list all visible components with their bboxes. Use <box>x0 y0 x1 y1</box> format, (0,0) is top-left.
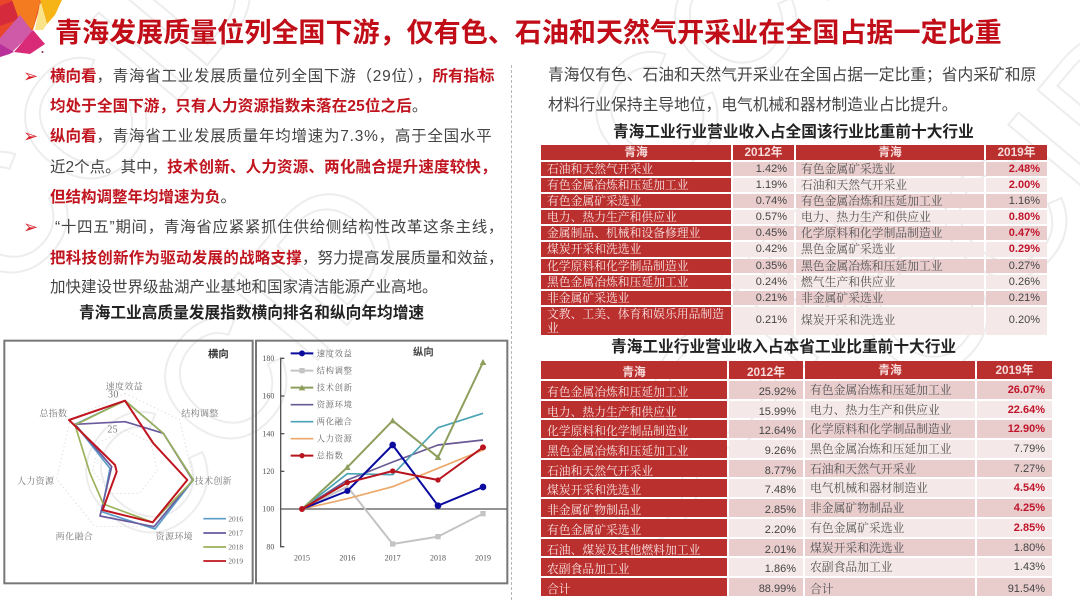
table 2 <box>541 361 1052 596</box>
table 2: 2012年 <box>747 365 785 379</box>
table 2: 7.79% <box>1014 443 1045 455</box>
table 1: 0.80% <box>1009 211 1040 223</box>
table 2: 1.43% <box>1014 561 1045 573</box>
table 2: 4.54% <box>1014 482 1045 494</box>
left text block: 但结构调整年均增速为负。 <box>50 189 236 206</box>
table 2: 8.77% <box>765 465 796 477</box>
left text block: 近2个点。其中，技术创新、人力资源、两化融合提升速度较快， <box>50 159 497 176</box>
table 1: 1.16% <box>1009 195 1040 207</box>
left text block: 均处于全国下游，只有人力资源指数未落在25位之后。 <box>50 98 428 115</box>
left text block: 纵向看，青海省工业发展质量年均增速为7.3%，高于全国水平 <box>50 128 492 145</box>
table 2: 合计 <box>547 582 571 596</box>
table 2: 电气机械和器材制造业 <box>810 481 928 495</box>
table 2: 7.27% <box>1014 463 1045 475</box>
table 1: 0.21% <box>756 314 787 326</box>
table 2: 有色金属冶炼和压延加工业 <box>810 383 952 397</box>
table 1: 有色金属矿采选业 <box>547 194 641 208</box>
table 1: 0.35% <box>756 260 787 272</box>
table 2: 青海 <box>878 363 902 377</box>
radar chart: 横向: 总指数 <box>39 408 67 419</box>
table 2: 1.86% <box>765 563 796 575</box>
table 1: 2012年 <box>744 145 783 159</box>
table 1: 黑色金属矿采选业 <box>801 242 895 256</box>
table 1: 0.45% <box>756 227 787 239</box>
table 1: 0.57% <box>756 211 787 223</box>
table 2: 合计 <box>810 582 834 596</box>
right intro text <box>548 66 1036 114</box>
line chart: 纵向: 2016 <box>339 554 355 563</box>
table 2: 2.01% <box>765 544 796 556</box>
table 2: 25.92% <box>759 386 796 398</box>
table 2: 石油和天然气开采业 <box>810 462 916 476</box>
table 2: 12.64% <box>759 425 796 437</box>
table 2: 电力、热力生产和供应业 <box>810 403 940 417</box>
radar chart: 横向 <box>3 340 254 584</box>
table 2: 2.85% <box>765 504 796 516</box>
radar chart: 横向: 两化融合 <box>56 530 93 541</box>
left text block: ➢ <box>23 217 38 238</box>
table 2: 煤炭开采和洗选业 <box>810 540 904 554</box>
chart heading: 青海工业高质量发展指数横向排名和纵向年均增速 <box>79 305 424 322</box>
table 1: 2.48% <box>1009 162 1040 174</box>
table 2: 非金属矿物制品业 <box>547 503 641 517</box>
left text block: “十四五”期间，青海省应紧紧抓住供给侧结构性改革这条主线， <box>55 219 504 236</box>
line chart: 纵向: 140 <box>262 429 274 438</box>
table 1: 非金属矿采选业 <box>801 291 884 305</box>
table 1: 石油和天然气开采业 <box>547 162 653 176</box>
table 2: 农副食品加工业 <box>810 560 893 574</box>
right intro text: 青海仅有色、石油和天然气开采业在全国占据一定比重；省内采矿和原 <box>548 67 1036 84</box>
legend <box>291 348 353 461</box>
radar chart: 横向: 2019 <box>228 557 243 566</box>
table 1: 非金属矿采选业 <box>547 291 630 305</box>
table 2: 黑色金属冶炼和压延加工业 <box>547 444 689 458</box>
legend: 资源环境 <box>317 400 353 410</box>
table 2: 有色金属矿采选业 <box>547 523 641 536</box>
table 2: 88.99% <box>759 583 796 595</box>
table 2: 1.80% <box>1014 542 1045 554</box>
table 1: 0.21% <box>1009 292 1040 304</box>
radar chart: 横向: 人力资源 <box>17 475 55 486</box>
radar chart: 横向: 30 <box>108 389 119 400</box>
table 2: 26.07% <box>1008 384 1045 396</box>
table 2: 有色金属冶炼和压延加工业 <box>547 385 689 399</box>
table 2: 非金属矿物制品业 <box>810 501 904 515</box>
table 2: 电力、热力生产和供应业 <box>547 405 677 418</box>
table 2: 91.54% <box>1008 583 1045 595</box>
table 1: 0.74% <box>756 195 787 207</box>
line chart: 纵向: 180 <box>262 354 274 363</box>
left text block: ➢ <box>23 126 38 147</box>
table 2: 2.85% <box>1014 522 1045 534</box>
radar chart: 横向: 横向 <box>208 348 229 361</box>
table 1: 化学原料和化学制品制造业 <box>801 226 943 240</box>
table 1: 0.24% <box>756 276 787 288</box>
table 2: 青海 <box>622 365 646 379</box>
table 2: 12.90% <box>1008 423 1045 435</box>
table 2: 7.48% <box>765 484 796 496</box>
radar chart: 横向: 2018 <box>228 543 243 552</box>
table 1: 煤炭开采和洗选业 <box>801 313 895 327</box>
table 2: 9.26% <box>765 445 796 457</box>
table 2: 15.99% <box>759 406 796 418</box>
table 2: 2.20% <box>765 524 796 536</box>
table 1: 黑色金属冶炼和压延加工业 <box>547 275 689 289</box>
radar chart: 横向: 结构调整 <box>181 408 219 419</box>
table 2: 4.25% <box>1014 502 1045 514</box>
left text block <box>23 66 504 296</box>
radar chart: 横向: 2016 <box>228 514 243 523</box>
table 2: 化学原料和化学制品制造业 <box>547 424 689 438</box>
table 1: 2019年 <box>997 145 1036 159</box>
table 2: 农副食品加工业 <box>547 562 630 576</box>
radar chart: 横向: 资源环境 <box>156 530 193 541</box>
line chart: 纵向: 80 <box>266 542 274 551</box>
table 2: 22.64% <box>1008 404 1045 416</box>
table 1: 有色金属矿采选业 <box>801 162 895 176</box>
radar chart: 横向: 速度效益 <box>106 380 143 391</box>
left text block: 把科技创新作为驱动发展的战略支撑，努力提高发展质量和效益， <box>50 250 504 267</box>
table 1: 有色金属冶炼和压延加工业 <box>547 178 689 192</box>
table 2 heading: 青海工业行业营业收入占本省工业比重前十大行业 <box>611 339 956 356</box>
left text block: ➢ <box>23 66 38 87</box>
line chart: 纵向: 2018 <box>430 554 446 563</box>
title: 青海发展质量位列全国下游，仅有色、石油和天然气开采业在全国占据一定比重 <box>55 18 1002 48</box>
table 1: 文教、工美、体育和娱乐用品制造业 <box>547 307 724 335</box>
table 1: 0.26% <box>1009 276 1040 288</box>
radar chart: 横向: 25 <box>107 425 118 436</box>
table 1: 燃气生产和供应业 <box>801 275 895 289</box>
table 2: 有色金属矿采选业 <box>810 521 904 535</box>
legend: 人力资源 <box>317 434 353 444</box>
logo decoration: corner polygons <box>0 0 62 57</box>
table 2: 化学原料和化学制品制造业 <box>810 422 952 436</box>
table 2: 石油和天然气开采业 <box>547 464 653 477</box>
right intro text: 材料行业保持主导地位，电气机械和器材制造业占比提升。 <box>548 97 958 114</box>
line chart: 纵向: 2017 <box>385 554 401 563</box>
table 1: 黑色金属冶炼和压延加工业 <box>801 259 943 273</box>
table 1: 化学原料和化学制品制造业 <box>547 259 689 273</box>
table 1 <box>541 145 1047 335</box>
table 1: 青海 <box>624 145 648 159</box>
legend: 总指数 <box>317 451 344 461</box>
radar chart: 横向: 技术创新 <box>195 475 232 486</box>
legend: 结构调整 <box>317 366 353 376</box>
table 1: 0.27% <box>1009 260 1040 272</box>
legend: 速度效益 <box>317 348 353 358</box>
table 1: 金属制品、机械和设备修理业 <box>547 226 700 240</box>
table 1: 有色金属冶炼和压延加工业 <box>801 194 943 208</box>
line chart: 纵向: 纵向 <box>413 346 434 359</box>
table 1: 0.21% <box>756 292 787 304</box>
table 1: 0.29% <box>1009 243 1040 255</box>
left text block: 横向看，青海省工业发展质量位列全国下游（29位），所有指标 <box>50 68 495 85</box>
table 1: 电力、热力生产和供应业 <box>801 210 931 224</box>
line chart: 纵向: 2019 <box>475 554 491 563</box>
divider <box>511 65 512 600</box>
table 2: 2019年 <box>995 363 1034 377</box>
table 1: 0.20% <box>1009 314 1040 326</box>
table 2: 石油、煤炭及其他燃料加工业 <box>547 542 700 556</box>
line chart: 纵向: 2015 <box>294 554 310 563</box>
table 1: 1.42% <box>756 162 787 174</box>
table 1: 0.42% <box>756 243 787 255</box>
legend: 两化融合 <box>317 417 353 427</box>
line chart: 纵向: 160 <box>262 392 274 401</box>
table 1: 0.47% <box>1009 227 1040 239</box>
table 1: 1.19% <box>756 179 787 191</box>
table 1: 煤炭开采和洗选业 <box>547 242 641 256</box>
radar chart: 横向: 2017 <box>228 529 243 538</box>
table 2: 煤炭开采和洗选业 <box>547 483 641 497</box>
table 1: 青海 <box>878 145 902 159</box>
table 1: 2.00% <box>1009 179 1040 191</box>
table 1: 石油和天然气开采业 <box>801 178 907 192</box>
line chart: 纵向: 100 <box>262 505 274 514</box>
table 2: 黑色金属冶炼和压延加工业 <box>810 442 952 456</box>
table 1: 电力、热力生产和供应业 <box>547 210 677 224</box>
legend: 技术创新 <box>317 383 353 393</box>
text: CCID <box>523 153 935 594</box>
line chart: 纵向 <box>255 340 508 584</box>
text: CCID <box>33 143 445 584</box>
left text block: 加快建设世界级盐湖产业基地和国家清洁能源产业高地。 <box>50 279 438 296</box>
line chart: 纵向: 120 <box>262 467 274 476</box>
table 1 heading: 青海工业行业营业收入占全国该行业比重前十大行业 <box>613 124 974 141</box>
